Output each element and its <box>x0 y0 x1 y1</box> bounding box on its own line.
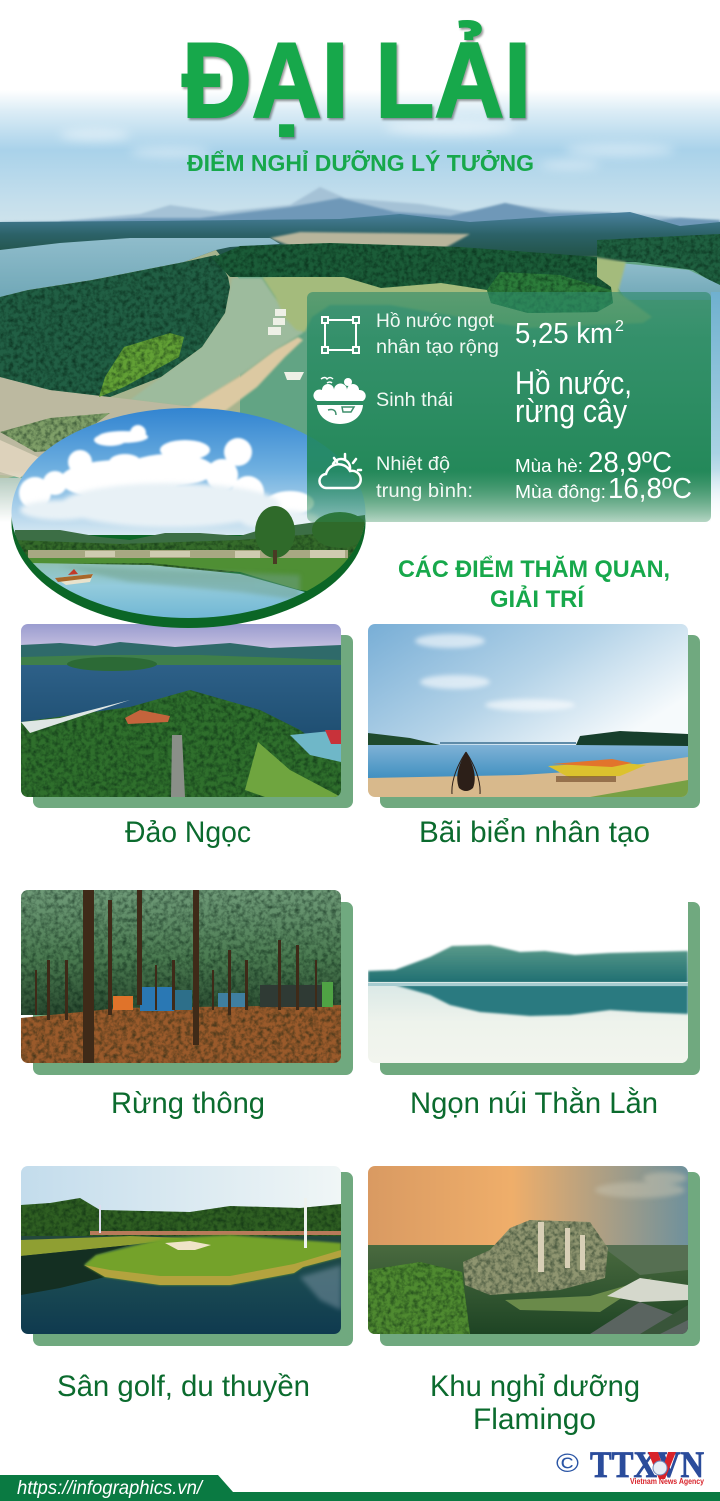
label: Đảo Ngọc: Đảo Ngọc <box>125 816 251 849</box>
grass peninsula <box>262 257 652 332</box>
text: lake area: 5,25 km <box>515 318 613 350</box>
left lake <box>0 238 280 300</box>
label: Ngọn núi Thằn Lằn: Ngọn núi Thằn Lằn <box>410 1087 658 1120</box>
text: squared superscript: 2 <box>615 318 624 335</box>
text: temperature label <box>376 454 473 502</box>
oval resort photo <box>10 405 368 628</box>
beach band <box>130 278 303 407</box>
icon: area square <box>322 317 359 353</box>
left forest <box>0 255 230 397</box>
heading: attractions <box>398 555 670 613</box>
icon: ecology <box>313 378 366 424</box>
heading: attractions: CÁC ĐIỂM THĂM QUAN, <box>398 555 670 583</box>
lower-left ground <box>0 377 193 478</box>
text: temperature label: Nhiệt độ <box>376 454 450 475</box>
card: Đảo Ngọc <box>21 624 353 808</box>
right forest <box>597 234 720 287</box>
card: Sân golf, du thuyền <box>21 1166 353 1346</box>
label: Khu nghỉ dưỡng Flamingo: Flamingo <box>473 1403 596 1436</box>
subtitle: ĐIỂM NGHỈ DƯỠNG LÝ TƯỞNG <box>187 148 534 176</box>
panel: lake facts <box>307 292 711 522</box>
label: Khu nghỉ dưỡng Flamingo: Khu nghỉ dưỡng <box>430 1370 640 1403</box>
label: Rừng thông: Rừng thông <box>111 1087 265 1120</box>
logo: TTXVN: © <box>556 1448 579 1478</box>
right lake <box>611 263 720 300</box>
sand beach <box>188 337 303 411</box>
icon: weather <box>319 454 361 488</box>
card: Khu nghỉ dưỡng Flamingo <box>368 1166 700 1346</box>
text: lake label <box>376 311 499 358</box>
footer band with url <box>0 1475 720 1501</box>
card: Ngọn núi Thằn Lằn <box>368 890 700 1075</box>
heading: attractions: GIẢI TRÍ <box>490 584 585 613</box>
text: ecology value: Hồ nước, <box>515 365 632 401</box>
label: Bãi biển nhân tạo: Bãi biển nhân tạo <box>419 816 650 849</box>
text: temperature label: trung bình: <box>376 481 473 502</box>
text: ecology label: Sinh thái <box>376 390 453 411</box>
logo: TTXVN: Vietnam News Agency <box>630 1477 704 1486</box>
text: summer temperature: Mùa hè: <box>515 456 583 476</box>
central forest <box>212 243 613 313</box>
text: winter temperature <box>515 473 692 505</box>
text: lake label: nhân tạo rộng <box>376 337 499 358</box>
card: Rừng thông <box>21 890 353 1075</box>
label: Khu nghỉ dưỡng Flamingo <box>430 1370 640 1436</box>
text: lake label: Hồ nước ngọt <box>376 311 495 332</box>
text: ecology value <box>515 365 632 429</box>
label: Sân golf, du thuyền: Sân golf, du thuyền <box>57 1370 310 1403</box>
title: ĐẠI LẢI <box>182 20 531 140</box>
card: Bãi biển nhân tạo <box>368 624 700 808</box>
text: summer temperature <box>515 447 672 479</box>
text: ecology value: rừng cây <box>515 393 627 429</box>
text: winter temperature: 16,8ºC <box>608 473 692 505</box>
main lake water <box>0 262 720 524</box>
text: summer temperature: 28,9ºC <box>588 447 672 479</box>
hero aerial photo of the lake <box>0 90 720 530</box>
logo: TTXVN: TTXVN <box>590 1445 704 1486</box>
footer band with url: https://infographics.vn/ <box>17 1478 204 1499</box>
text: winter temperature: Mùa đông: <box>515 482 606 502</box>
